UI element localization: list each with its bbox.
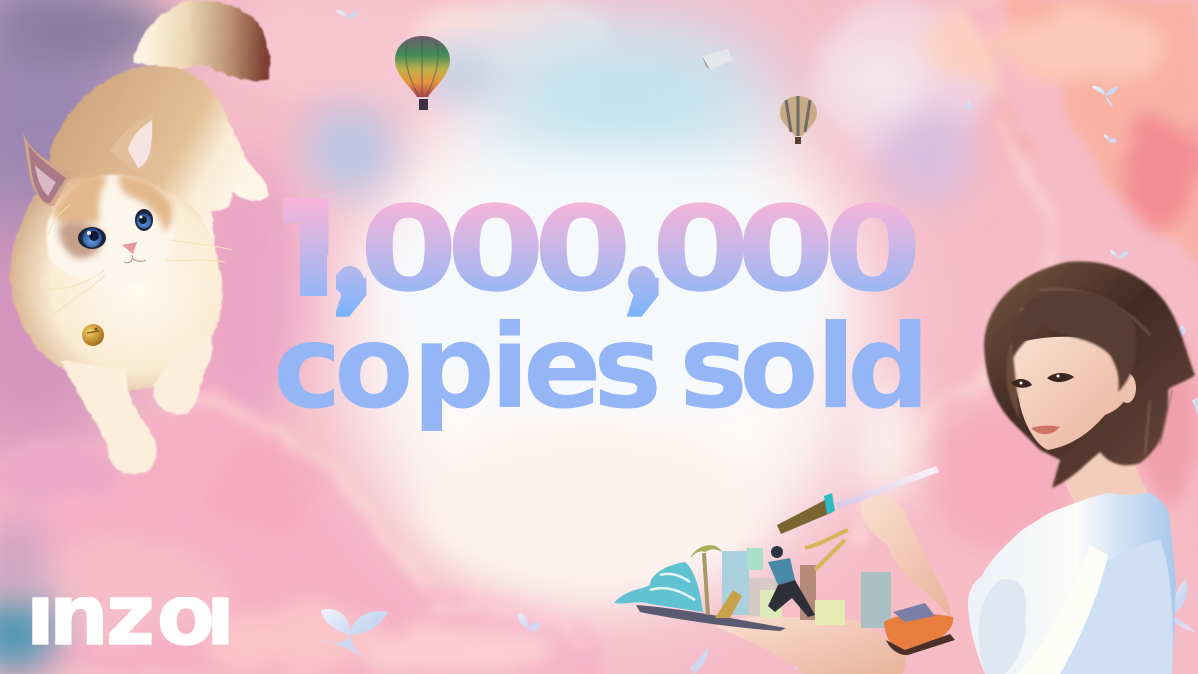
floating box xyxy=(702,49,733,70)
coaster head xyxy=(824,493,835,514)
palm tree xyxy=(690,545,722,615)
clouds: lower left bank xyxy=(0,395,610,674)
cat tail xyxy=(133,1,270,81)
orange car xyxy=(884,603,955,655)
girl xyxy=(715,261,1195,674)
clouds: bottom left teal haze xyxy=(0,520,56,672)
girl t-shirt xyxy=(968,493,1176,674)
wave xyxy=(614,562,703,612)
girl neck xyxy=(1056,448,1157,510)
cat ears xyxy=(23,113,153,206)
clouds: lower left highlights xyxy=(0,440,550,674)
girl eyes xyxy=(1011,373,1074,388)
clouds: back pink layer xyxy=(220,0,1090,350)
stylus xyxy=(835,466,939,509)
hot air balloon: small striped xyxy=(780,96,817,144)
clouds: right side shading xyxy=(780,10,1198,660)
butterflies xyxy=(316,10,1198,674)
girl ear xyxy=(1118,373,1136,403)
running figure xyxy=(768,546,815,617)
gold track xyxy=(805,530,848,570)
cat back and haunch xyxy=(50,66,268,280)
headline: number 1,000,000: 1,000,000 xyxy=(263,180,922,328)
cat fluffy chest xyxy=(10,178,222,391)
girl lips xyxy=(1031,426,1060,434)
girl hair back xyxy=(984,261,1195,488)
cat eyes xyxy=(78,209,153,249)
miniature world on tablet xyxy=(614,493,955,655)
tablet xyxy=(636,605,786,631)
cat bell xyxy=(82,324,104,346)
clouds: central white opening xyxy=(305,25,973,605)
clouds: lit rims xyxy=(195,120,1051,640)
cat xyxy=(10,1,270,474)
clouds: right bank xyxy=(710,0,1198,674)
girl hand holding tablet xyxy=(715,617,906,674)
girl arm with stylus hand xyxy=(860,496,952,620)
girl hair fringe xyxy=(1006,291,1136,420)
roller coaster xyxy=(777,500,833,534)
girl face xyxy=(1010,337,1127,450)
cat nose and mouth xyxy=(122,242,146,263)
cat whiskers xyxy=(42,205,232,318)
inZOI logo: inzoi xyxy=(26,566,235,664)
buildings xyxy=(722,548,891,628)
cat front paws xyxy=(60,335,213,474)
cat face xyxy=(42,174,232,318)
small explorer xyxy=(715,590,742,618)
headline: copies sold: copies sold xyxy=(273,300,930,435)
hot air balloon: large rainbow xyxy=(395,36,450,110)
